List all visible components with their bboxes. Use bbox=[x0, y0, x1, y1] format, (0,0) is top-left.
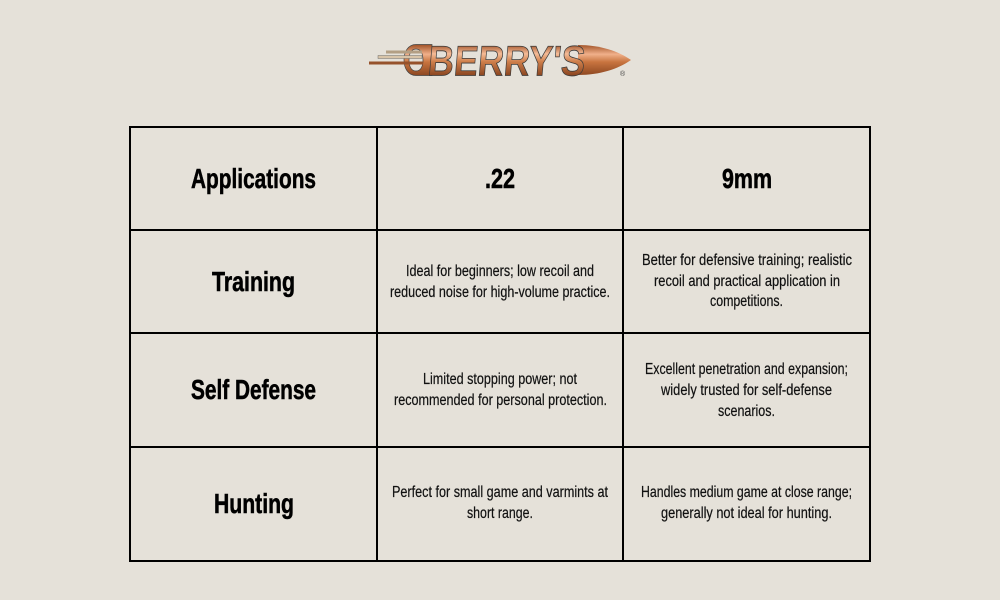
header: Applications: Applications bbox=[191, 163, 316, 194]
Training 9mm text: Better for defensive training; realistic bbox=[642, 252, 852, 269]
Training 9mm text: competitions. bbox=[710, 293, 783, 310]
logo wordmark: BERRY'S bbox=[426, 38, 587, 85]
Hunting .22 text: short range. bbox=[467, 505, 533, 522]
comparison table grid bbox=[130, 127, 870, 561]
logo bullet tip bbox=[578, 45, 631, 75]
Hunting 9mm text: Handles medium game at close range; bbox=[641, 484, 852, 501]
row: Training bbox=[212, 252, 852, 310]
Training .22 text: Ideal for beginners; low recoil and bbox=[406, 263, 594, 280]
Self Defense 9mm text: widely trusted for self-defense bbox=[660, 382, 832, 399]
Self Defense .22 text bbox=[394, 371, 607, 409]
Self Defense 9mm text: Excellent penetration and expansion; bbox=[645, 361, 848, 378]
Self Defense 9mm text bbox=[645, 361, 848, 420]
row: Self Defense bbox=[191, 361, 848, 420]
Hunting 9mm text bbox=[641, 484, 852, 522]
row heading: Self Defense: Self Defense bbox=[191, 374, 316, 405]
Self Defense .22 text: recommended for personal protection. bbox=[394, 392, 607, 409]
row: Hunting bbox=[214, 484, 852, 522]
logo registered mark: ® bbox=[620, 70, 626, 78]
Training .22 text bbox=[390, 263, 610, 301]
Self Defense .22 text: Limited stopping power; not bbox=[423, 371, 578, 388]
logo: Berry's bullet bbox=[369, 38, 631, 85]
header row bbox=[191, 163, 772, 194]
header: .22: .22 bbox=[485, 163, 515, 194]
Hunting .22 text: Perfect for small game and varmints at bbox=[392, 484, 609, 501]
Hunting .22 text bbox=[392, 484, 609, 522]
Self Defense 9mm text: scenarios. bbox=[718, 403, 775, 420]
row heading: Training: Training bbox=[212, 266, 295, 297]
row heading: Hunting: Hunting bbox=[214, 488, 294, 519]
Training 9mm text: recoil and practical application in bbox=[654, 273, 840, 290]
header: 9mm: 9mm bbox=[722, 163, 772, 194]
logo speed lines bbox=[369, 50, 423, 64]
Hunting 9mm text: generally not ideal for hunting. bbox=[661, 505, 832, 522]
Training .22 text: reduced noise for high-volume practice. bbox=[390, 284, 610, 301]
Training 9mm text bbox=[642, 252, 852, 310]
logo barrel ring bbox=[404, 44, 432, 76]
